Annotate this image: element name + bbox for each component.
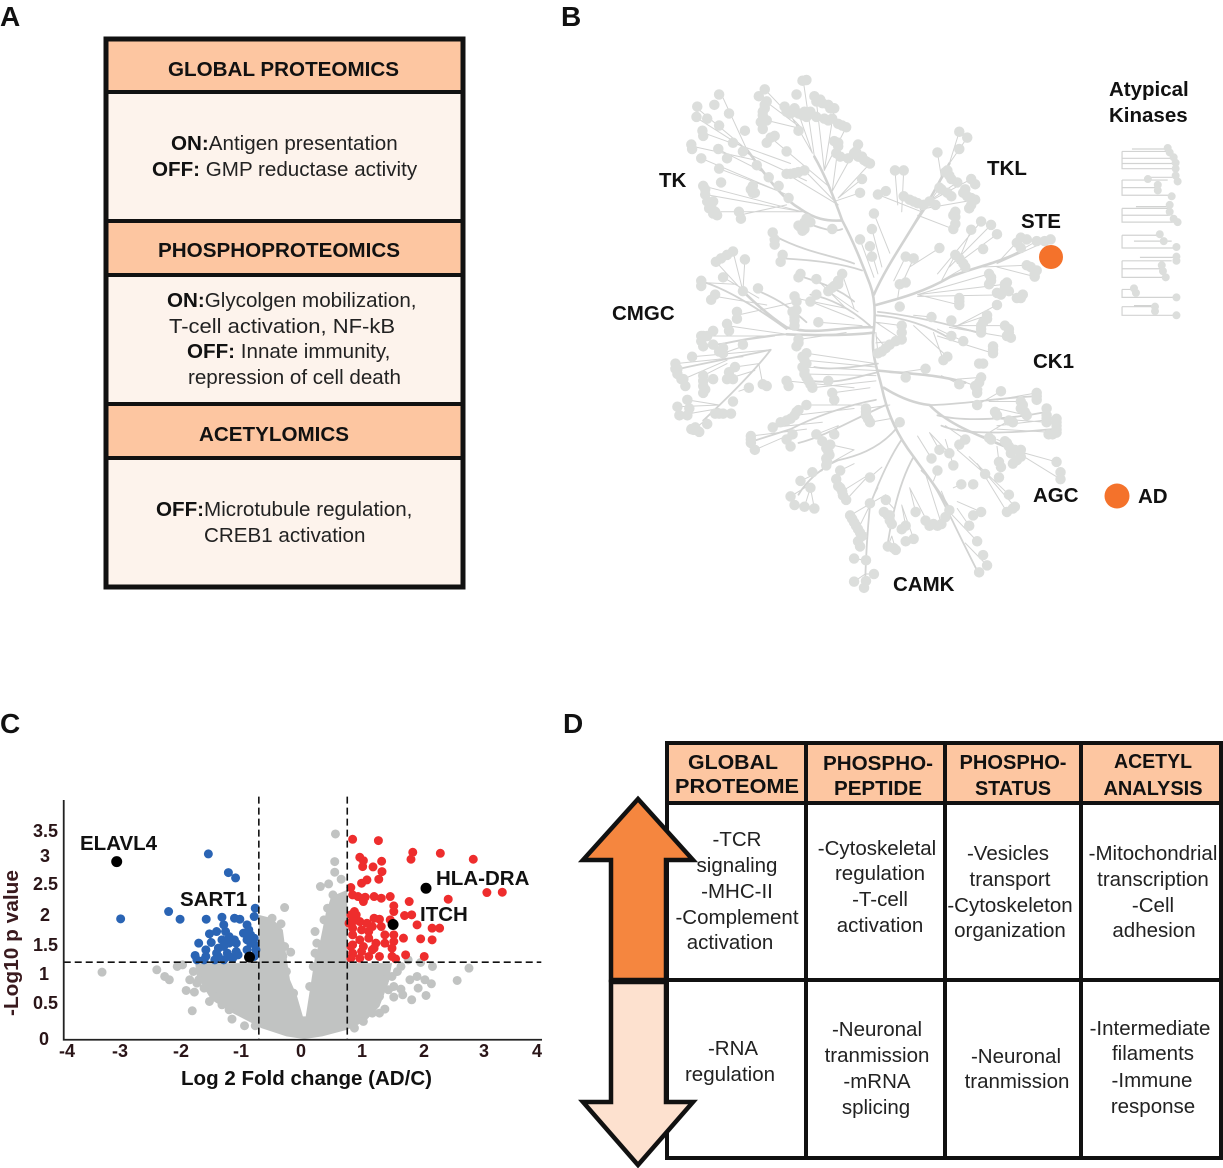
down-regulated cell texts: splicing bbox=[842, 1096, 910, 1119]
column headers: ACETYL bbox=[1114, 750, 1192, 773]
text: acetylomics results bbox=[156, 498, 412, 547]
plotted points bbox=[64, 797, 542, 1040]
x axis tick labels: -3 bbox=[112, 1041, 128, 1061]
panel A: omics summary table bbox=[106, 39, 463, 587]
column headers: PHOSPHO- bbox=[960, 751, 1066, 774]
x axis tick labels: 3 bbox=[479, 1041, 489, 1061]
family labels: CK1 bbox=[1033, 350, 1074, 373]
text: phosphoproteomics results: ON:Glycolgen mobilization, bbox=[167, 289, 417, 312]
text: acetylomics results: OFF:Microtubule regulation, bbox=[156, 498, 412, 521]
protein labels: SART1 bbox=[180, 888, 247, 911]
text: phosphoproteomics results bbox=[167, 289, 417, 389]
down-regulated cell texts: -Neuronal bbox=[971, 1045, 1061, 1068]
atypical kinases small tree bbox=[1122, 148, 1178, 315]
down-regulated cell texts: -Intermediate bbox=[1090, 1017, 1210, 1040]
family labels: STE bbox=[1021, 210, 1061, 233]
text: global proteomics results: ON:Antigen presentation bbox=[171, 132, 398, 155]
panel label A: A bbox=[0, 1, 20, 32]
table grid bbox=[667, 743, 1221, 1158]
legend: AD marker bbox=[1104, 484, 1168, 508]
x axis tick labels: -4 bbox=[59, 1041, 75, 1061]
family labels: Kinases bbox=[1109, 104, 1188, 127]
red up-regulated points bbox=[349, 839, 502, 959]
highlighted STE node bbox=[1039, 245, 1063, 269]
y axis tick labels: 0.5 bbox=[33, 993, 58, 1013]
panel C: volcano plot bbox=[1, 797, 542, 1090]
text: phosphoproteomics results: T-cell activation, NF-kB bbox=[169, 315, 395, 338]
column headers: ANALYSIS bbox=[1104, 777, 1202, 800]
arrow: down-regulated bbox=[583, 982, 693, 1165]
y axis tick labels: 3 bbox=[40, 846, 50, 866]
text: phosphoproteomics results: repression of cell death bbox=[188, 366, 401, 389]
column headers: PHOSPHO- bbox=[823, 752, 933, 775]
heading: phosphoproteomics: PHOSPHOPROTEOMICS bbox=[158, 239, 400, 262]
up-regulated cell texts: -TCR bbox=[713, 828, 761, 851]
up-regulated cell texts: -T-cell bbox=[852, 888, 908, 911]
blue down-regulated points bbox=[121, 854, 256, 960]
y axis tick labels: 2.5 bbox=[33, 874, 58, 894]
x axis tick labels: 1 bbox=[357, 1041, 367, 1061]
text: phosphoproteomics results: OFF: Innate immunity, bbox=[187, 340, 390, 363]
legend: AD marker: AD bbox=[1138, 485, 1168, 508]
text: acetylomics results: CREB1 activation bbox=[204, 524, 365, 547]
x axis tick labels: 0 bbox=[296, 1041, 306, 1061]
text: global proteomics results bbox=[152, 132, 418, 181]
panel B: kinome tree bbox=[612, 78, 1189, 596]
down-regulated cell texts: filaments bbox=[1112, 1042, 1194, 1065]
panel D: pathway matrix bbox=[583, 743, 1221, 1165]
up-regulated cell texts: signaling bbox=[697, 854, 777, 877]
x axis tick labels: -1 bbox=[233, 1041, 249, 1061]
up-regulated cell texts: transport bbox=[970, 868, 1051, 891]
family labels: CAMK bbox=[893, 573, 955, 596]
down-regulated cell texts: response bbox=[1111, 1095, 1195, 1118]
y axis tick labels: 1 bbox=[39, 964, 49, 984]
family labels: TKL bbox=[987, 157, 1027, 180]
family labels: Atypical bbox=[1109, 78, 1189, 101]
up-regulated cell texts: -Mitochondrial bbox=[1089, 842, 1217, 865]
x axis tick labels: 4 bbox=[532, 1041, 542, 1061]
column headers: STATUS bbox=[975, 777, 1051, 800]
y axis tick labels: 2 bbox=[40, 905, 50, 925]
y axis tick labels: 1.5 bbox=[33, 935, 58, 955]
axes bbox=[64, 800, 542, 1040]
y axis tick labels: 3.5 bbox=[33, 821, 58, 841]
up-regulated cell texts: -Complement bbox=[675, 906, 799, 929]
up-regulated cell texts: activation bbox=[687, 931, 773, 954]
panel label C: C bbox=[0, 708, 20, 739]
x axis tick labels: 2 bbox=[419, 1041, 429, 1061]
family labels: AGC bbox=[1033, 484, 1079, 507]
down-regulated cell texts bbox=[685, 1017, 1210, 1119]
down-regulated cell texts: -mRNA bbox=[843, 1070, 911, 1093]
down-regulated cell texts: -Immune bbox=[1112, 1069, 1192, 1092]
up-regulated cell texts: -Cytoskeletal bbox=[818, 837, 936, 860]
kinome tree branches and nodes bbox=[675, 80, 1061, 588]
panel label B: B bbox=[561, 1, 581, 32]
column headers: PEPTIDE bbox=[834, 777, 922, 800]
y axis tick labels: 0 bbox=[39, 1029, 49, 1049]
family labels: TK bbox=[659, 169, 687, 192]
text: global proteomics results: OFF: GMP reductase activity bbox=[152, 158, 418, 181]
up-regulated cell texts: -Cell bbox=[1132, 894, 1174, 917]
table header fills bbox=[667, 745, 1221, 803]
up-regulated cell texts: -MHC-II bbox=[701, 880, 773, 903]
down-regulated cell texts: tranmission bbox=[825, 1044, 929, 1067]
up-regulated cell texts: organization bbox=[954, 919, 1066, 942]
y axis tick labels bbox=[33, 821, 58, 1049]
up-regulated cell texts: transcription bbox=[1097, 868, 1209, 891]
threshold lines bbox=[64, 797, 541, 1040]
y axis title: -Log10 p value bbox=[1, 870, 23, 1016]
heading: global proteomics: GLOBAL PROTEOMICS bbox=[168, 58, 399, 81]
family labels: CMGC bbox=[612, 302, 675, 325]
panel label D: D bbox=[563, 708, 583, 739]
up-regulated cell texts: -Cytoskeleton bbox=[947, 894, 1073, 917]
column headers: PROTEOME bbox=[675, 775, 799, 798]
column headers: GLOBAL bbox=[688, 751, 778, 774]
up-regulated cell texts: adhesion bbox=[1112, 919, 1196, 942]
protein labels bbox=[80, 832, 530, 926]
down-regulated cell texts: -Neuronal bbox=[832, 1018, 922, 1041]
protein labels: ELAVL4 bbox=[80, 832, 158, 855]
up-regulated cell texts bbox=[675, 828, 1217, 954]
column headers bbox=[675, 750, 1202, 800]
family labels bbox=[612, 78, 1189, 596]
arrow: up-regulated bbox=[583, 799, 693, 980]
up-regulated cell texts: regulation bbox=[835, 862, 925, 885]
x axis tick labels: -2 bbox=[173, 1041, 189, 1061]
non-significant gray points bbox=[102, 834, 469, 1039]
down-regulated cell texts: regulation bbox=[685, 1063, 775, 1086]
protein labels: HLA-DRA bbox=[436, 867, 530, 890]
x axis title: Log 2 Fold change (AD/C) bbox=[181, 1067, 432, 1090]
up-regulated cell texts: -Vesicles bbox=[967, 842, 1049, 865]
black labelled points bbox=[117, 862, 426, 957]
x axis tick labels bbox=[59, 1041, 542, 1061]
down-regulated cell texts: tranmission bbox=[965, 1070, 1069, 1093]
up-regulated cell texts: activation bbox=[837, 914, 923, 937]
down-regulated cell texts: -RNA bbox=[708, 1037, 758, 1060]
heading: acetylomics: ACETYLOMICS bbox=[199, 423, 349, 446]
protein labels: ITCH bbox=[420, 903, 468, 926]
